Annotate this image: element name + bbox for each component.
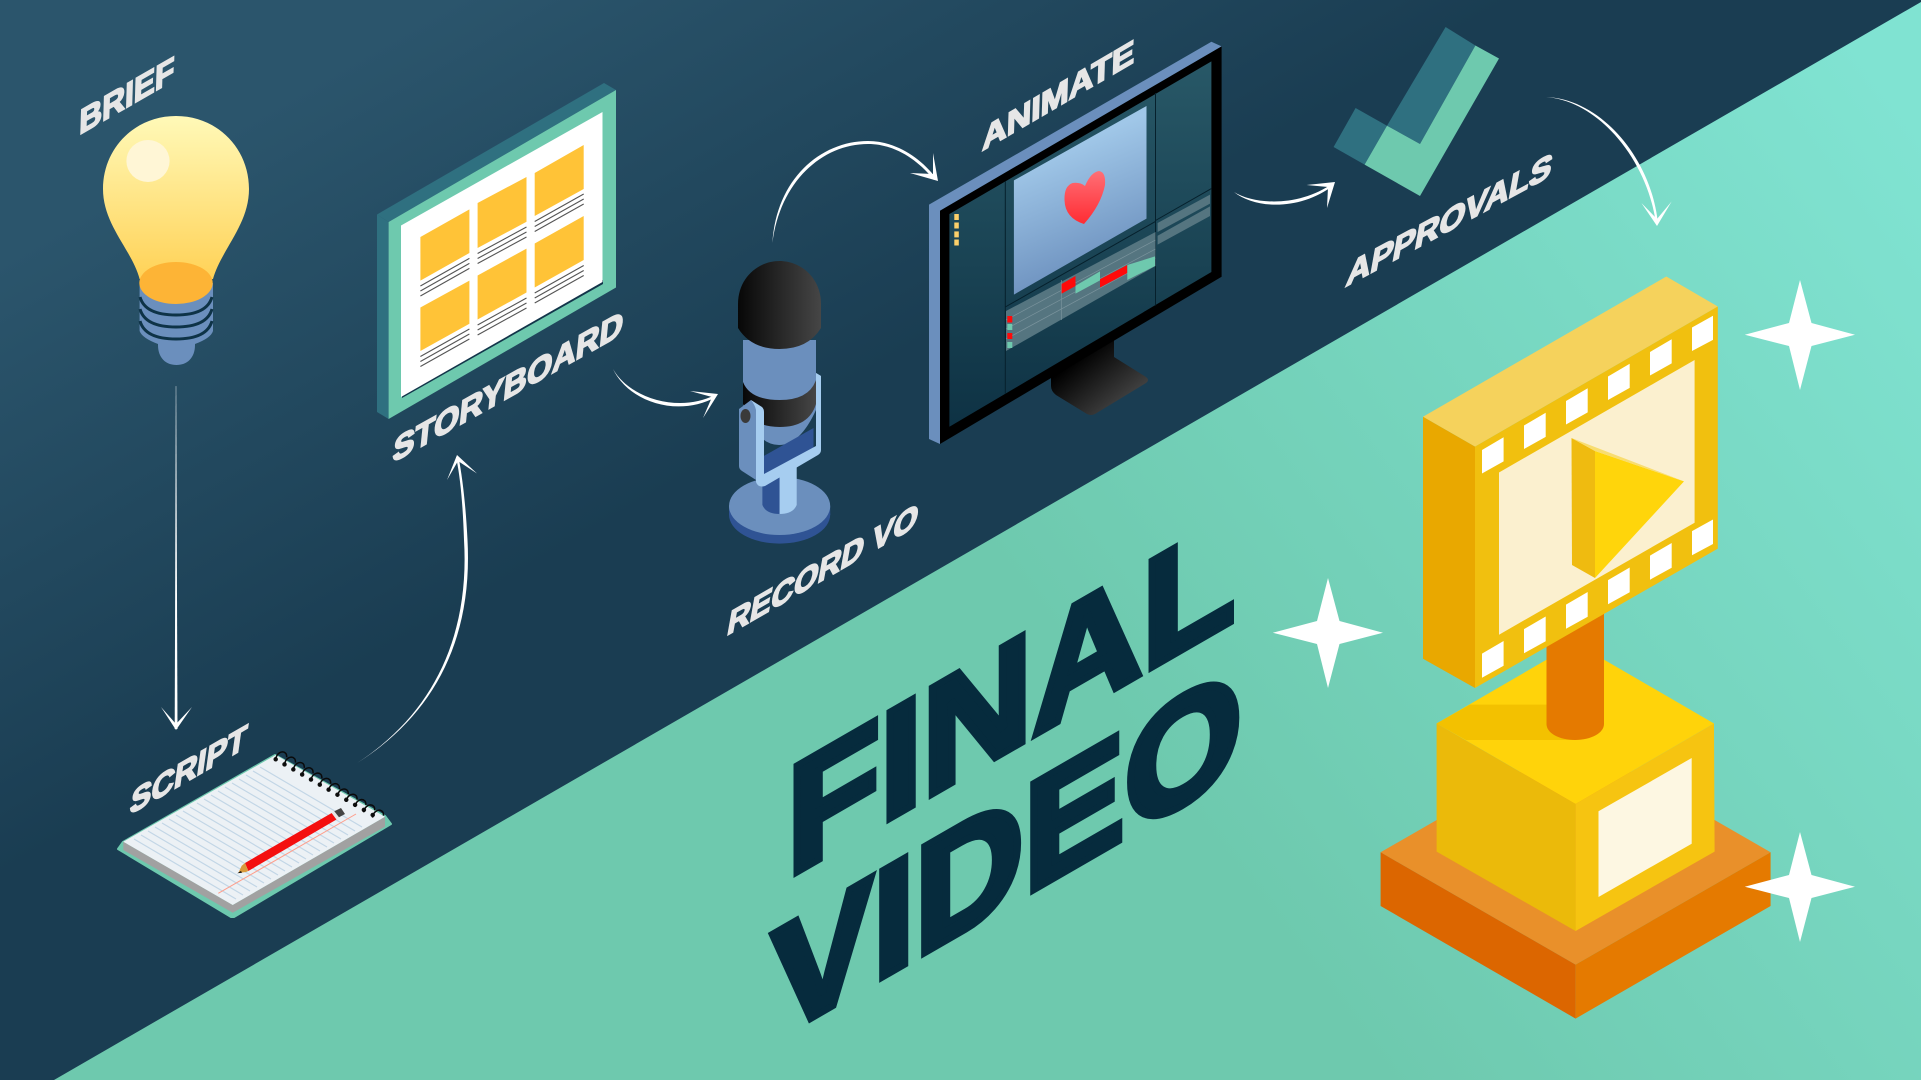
storyboard panels xyxy=(420,145,584,351)
arrow: approvals to final video xyxy=(1546,97,1672,226)
icon: film trophy xyxy=(1381,276,1771,1019)
sparkle: left of trophy xyxy=(1273,578,1383,688)
sparkle: upper right xyxy=(1745,280,1855,390)
film perforations xyxy=(1482,316,1713,678)
title: FINAL VIDEO: FINAL xyxy=(787,480,1235,911)
icon: monitor xyxy=(929,42,1222,444)
arrow: storyboard to microphone xyxy=(613,369,718,418)
timeline xyxy=(1006,232,1156,351)
sparkle: lower right xyxy=(1745,832,1855,942)
arrow: script to storyboard xyxy=(357,455,477,763)
trophy pole xyxy=(1546,610,1604,740)
trophy pedestal xyxy=(1437,643,1715,931)
title: FINAL VIDEO: VIDEO xyxy=(772,630,1242,1074)
label: APPROVALS: APPROVALS xyxy=(1344,145,1556,294)
arrow: microphone to monitor xyxy=(772,141,938,243)
preview window xyxy=(1014,106,1146,295)
icon: storyboard frame xyxy=(377,83,616,419)
label: RECORD VO: RECORD VO xyxy=(725,496,921,644)
label: BRIEF: BRIEF xyxy=(79,50,175,143)
trophy plinth xyxy=(1381,740,1771,1019)
icon: light bulb xyxy=(103,116,249,365)
icon: microphone xyxy=(729,261,830,544)
label: STORYBOARD: STORYBOARD xyxy=(391,303,625,470)
label: SCRIPT: SCRIPT xyxy=(128,718,249,823)
icon: check mark xyxy=(1334,27,1499,196)
arrow: brief to script xyxy=(161,386,192,730)
arrow: monitor to approvals xyxy=(1234,182,1335,208)
film block xyxy=(1423,276,1718,688)
monitor stand xyxy=(1051,335,1148,415)
heart xyxy=(1064,171,1105,224)
label: ANIMATE: ANIMATE xyxy=(982,33,1135,158)
play button xyxy=(1572,438,1684,578)
pencil xyxy=(237,808,345,873)
icon: notepad xyxy=(118,752,391,917)
